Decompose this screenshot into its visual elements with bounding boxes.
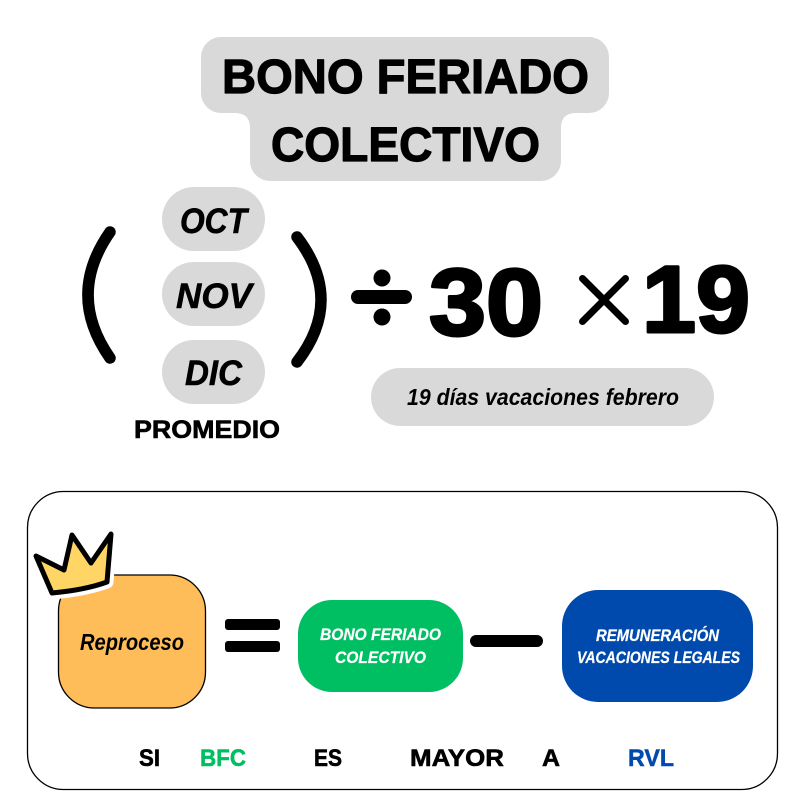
minus sign: [470, 635, 543, 647]
box: bono feriado colectivo: BONO FERIADO: [320, 626, 441, 644]
pill: NOV: NOV: [176, 277, 255, 316]
pill: DIC: DIC: [185, 354, 243, 393]
box: remuneración vacaciones legales: [562, 590, 753, 702]
number: 30: 30: [429, 250, 543, 356]
caption: si bfc es mayor a rvl: BFC: [200, 745, 246, 772]
note: 19 días vacaciones febrero: 19 días vacaciones febrero: [407, 384, 679, 410]
box: Reproceso: Reproceso: [80, 629, 184, 655]
caption: si bfc es mayor a rvl: A: [542, 745, 560, 772]
box: remuneración vacaciones legales: VACACIONES LEGALES: [577, 649, 740, 667]
caption: si bfc es mayor a rvl: SI: [139, 745, 160, 772]
pill: NOV: [162, 262, 265, 326]
caption: si bfc es mayor a rvl: [139, 745, 674, 772]
pill: OCT: OCT: [180, 202, 249, 241]
caption: si bfc es mayor a rvl: RVL: [628, 745, 674, 772]
box: Reproceso: [58, 575, 206, 708]
right parenthesis: [297, 237, 321, 362]
caption: si bfc es mayor a rvl: ES: [314, 745, 342, 772]
title: [201, 37, 609, 181]
number: 19: 19: [642, 247, 750, 353]
title: BONO FERIADO: [222, 51, 589, 104]
multiplication sign: [582, 278, 626, 322]
title: COLECTIVO: [271, 119, 540, 172]
box: remuneración vacaciones legales: REMUNERACIÓN: [596, 626, 720, 645]
box: bono feriado colectivo: COLECTIVO: [335, 649, 426, 667]
box: bono feriado colectivo: [298, 600, 463, 692]
icon: crown: [36, 534, 111, 593]
panel: reproceso formula: [28, 492, 778, 790]
pill: OCT: [162, 187, 265, 251]
label: promedio: PROMEDIO: [134, 416, 280, 444]
equals sign: [225, 619, 280, 652]
caption: si bfc es mayor a rvl: MAYOR: [410, 745, 504, 772]
pill: DIC: [162, 340, 265, 404]
left parenthesis: [88, 232, 110, 358]
note: 19 días vacaciones febrero: [371, 368, 714, 426]
division sign: [351, 270, 412, 326]
